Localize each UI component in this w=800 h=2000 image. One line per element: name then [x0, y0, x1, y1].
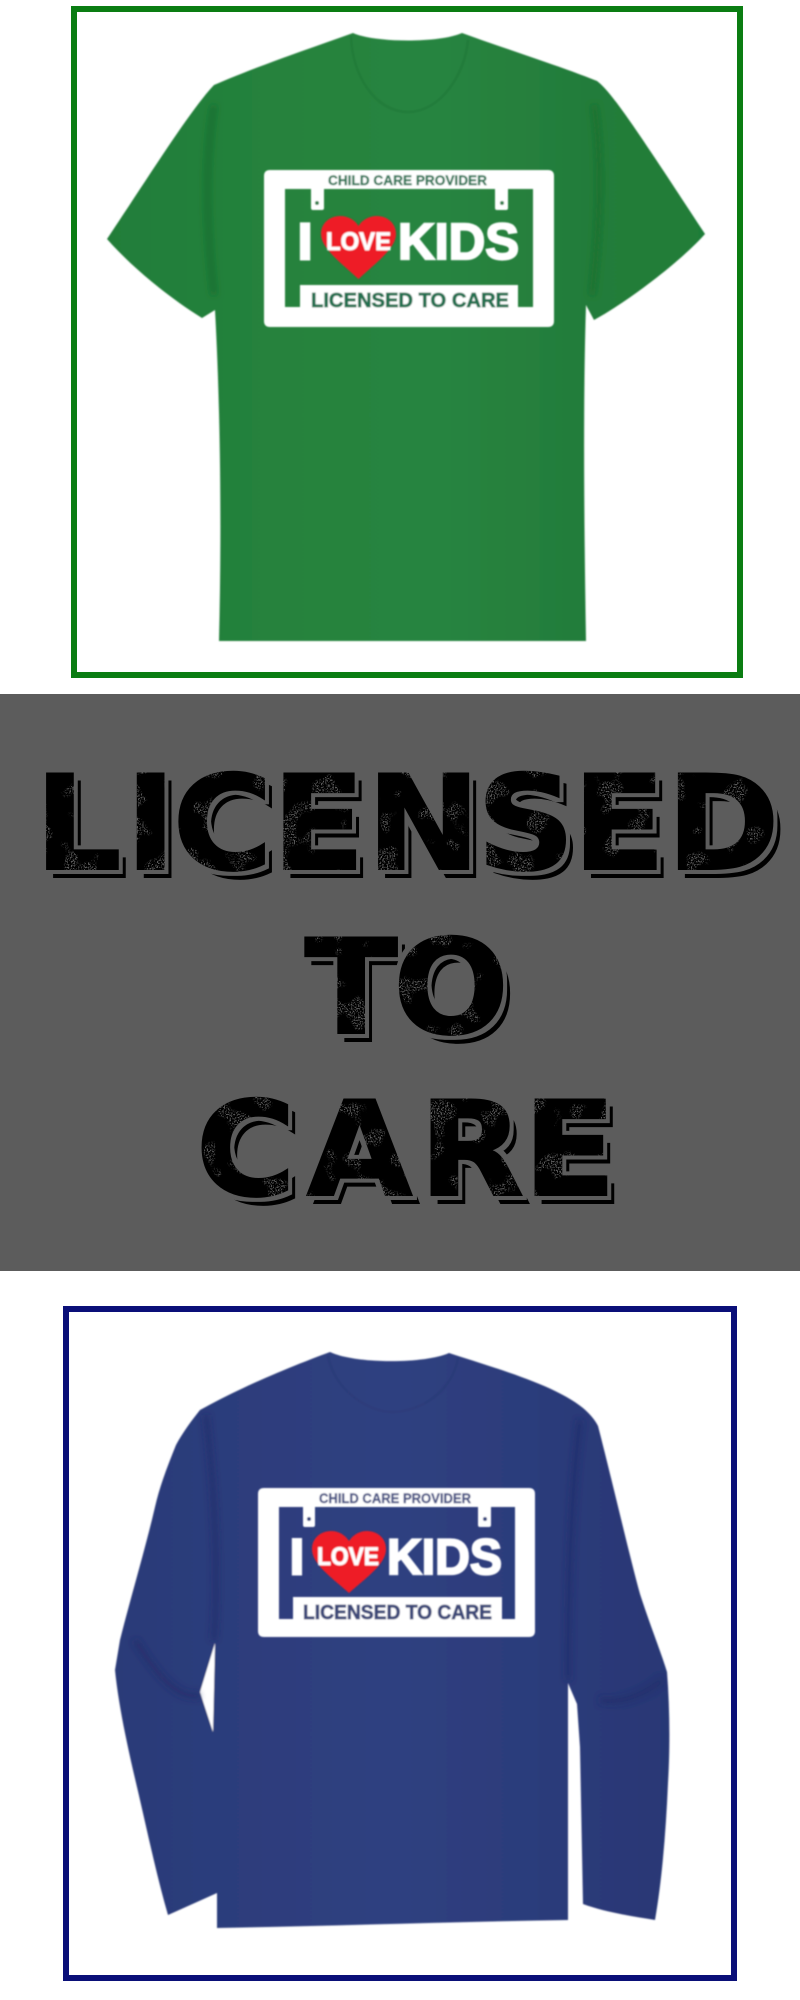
text: kids: KIDS	[398, 213, 519, 270]
icon: green short-sleeve t-shirt	[107, 33, 705, 641]
text: love: LOVE	[317, 1543, 379, 1571]
mounting holes	[307, 1517, 487, 1521]
license plate graphic: green shirt	[264, 170, 554, 327]
icon: red heart	[312, 1531, 386, 1593]
plate frame	[264, 170, 554, 327]
text: I: I	[298, 213, 312, 270]
title line: care: CARE	[196, 1073, 616, 1226]
text: love: LOVE	[326, 228, 391, 256]
panel: navy long-sleeve product	[66, 1309, 734, 1978]
text: licensed to care: LICENSED TO CARE	[311, 290, 509, 312]
text: kids: KIDS	[387, 1529, 502, 1585]
panel: green t-shirt product	[74, 9, 740, 675]
mounting holes	[315, 201, 504, 205]
title: licensed to care	[35, 747, 780, 1226]
gap between left sleeve and body	[200, 1643, 215, 1732]
plate frame	[258, 1488, 535, 1637]
green frame	[74, 9, 740, 675]
license plate graphic: navy shirt	[258, 1488, 535, 1637]
text: I: I	[290, 1529, 304, 1585]
icon: navy long-sleeve shirt	[115, 1352, 669, 1928]
title line: to: TO	[305, 911, 509, 1064]
panel: grey title banner	[0, 694, 800, 1271]
title line: licensed: LICENSED	[35, 747, 780, 900]
navy frame	[66, 1309, 734, 1978]
text: licensed to care: LICENSED TO CARE	[303, 1602, 492, 1624]
text: child care provider: CHILD CARE PROVIDER	[319, 1490, 471, 1506]
icon: red heart	[321, 216, 396, 279]
text: child care provider: CHILD CARE PROVIDER	[328, 172, 487, 188]
banner background	[0, 694, 800, 1271]
